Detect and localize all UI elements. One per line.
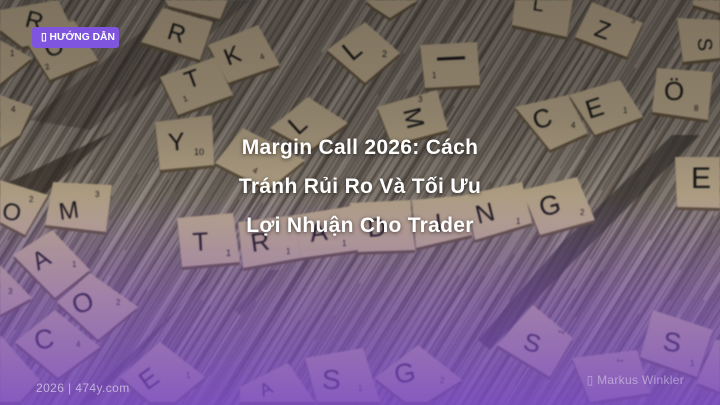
tile: Z: 3 (631, 16, 636, 25)
tile: O under badge: O (41, 32, 68, 64)
tile: bottom S: S (322, 364, 341, 395)
tile: O left: 2 (29, 195, 34, 204)
tile: S: S (520, 328, 544, 359)
tile: O lower: 2 (116, 298, 121, 307)
tile: A trading (296, 205, 358, 258)
tile: bottom S: 1 (358, 384, 363, 393)
tile: A lower left (13, 230, 90, 298)
tile: O lower: O (68, 285, 98, 321)
title: Margin Call 2026: Cách (242, 136, 478, 159)
tile: L: L (336, 33, 367, 67)
tile: lower right blank: 1 (615, 358, 625, 364)
tile: A lower left: A (27, 243, 56, 276)
tile: bottom G: 2 (440, 376, 445, 385)
tile: C: C (529, 101, 556, 136)
tile: L lower (270, 97, 348, 150)
tile: T trading: T (192, 226, 209, 257)
tile: corner (693, 0, 720, 13)
tile: lower right blank (572, 350, 650, 402)
tile: I trading (412, 195, 472, 248)
category badge: ▯ HƯỚNG DẪN (41, 32, 115, 43)
tile: top L right (512, 0, 573, 37)
tile: Y (155, 115, 214, 170)
tile: T: 1 (182, 94, 189, 104)
tile: E right: E (691, 162, 711, 195)
tile: E lower (120, 342, 205, 402)
tile: left 4: 4 (11, 105, 16, 114)
tile: G trading: G (536, 188, 564, 223)
tile: R trading: 1 (286, 247, 291, 256)
tile: T: T (181, 64, 204, 95)
tile: M rotated: 3 (418, 95, 423, 104)
tile: top strip (165, 0, 228, 19)
tile: N trading: N (472, 196, 498, 230)
tile: L: 2 (382, 49, 387, 59)
tile: K: 4 (258, 52, 266, 62)
tile: A lower left: 1 (72, 260, 77, 269)
category badge (32, 27, 119, 48)
tile: left edge (0, 40, 32, 84)
tile: left 3: 3 (8, 287, 13, 296)
tile: left edge: 1 (10, 49, 15, 58)
tile: right edge (697, 340, 720, 392)
tile: E lower: E (133, 361, 165, 396)
tile: Z: Z (591, 15, 614, 46)
tile: A trading: 1 (342, 239, 347, 248)
tile: G trading (522, 177, 595, 235)
tile: R (141, 8, 213, 60)
tile: bottom S (305, 348, 380, 402)
tile: A trading: A (308, 216, 330, 248)
tile: Y: Y (167, 128, 186, 157)
tile: centre 4: 4 (251, 166, 259, 176)
tile: E lower: 1 (186, 371, 191, 380)
tile: T trading (177, 213, 240, 267)
tile: C lower: 4 (76, 340, 81, 349)
tile: O under badge (27, 20, 98, 80)
tile: D trading: D (366, 212, 387, 243)
tile: top left R: R (22, 6, 46, 36)
tile: S top right: S (693, 37, 715, 52)
tile: K: K (220, 41, 245, 72)
tile: bottom G (375, 345, 462, 402)
tile: D trading (350, 200, 415, 252)
tile: M (45, 182, 112, 232)
tile: M rotated (377, 90, 448, 145)
tile: left bottom (0, 335, 40, 402)
tile: centre 4 (215, 128, 305, 190)
tile: E: E (582, 91, 607, 125)
tile: L lower: L (282, 108, 313, 140)
tile: I: 1 (432, 71, 437, 80)
tile: R trading (238, 215, 300, 268)
tile: M: 3 (95, 190, 100, 199)
tile: M rotated: M (397, 105, 429, 132)
tile: S right: S (661, 326, 683, 358)
tile: left 3 (0, 265, 32, 315)
tile: O under badge: 2 (44, 62, 51, 72)
tile: S: 1 (556, 328, 567, 336)
title: Lợi Nhuận Cho Trader (246, 214, 474, 237)
tile: S right (640, 310, 713, 377)
tile: bottom G: G (392, 357, 418, 390)
tile: S right: 1 (690, 359, 695, 368)
tile: C (515, 95, 588, 150)
tile: O lower (57, 273, 138, 340)
tile: O umlaut: Ö (664, 76, 684, 106)
tile: L (327, 22, 400, 83)
tile: N trading: 1 (516, 217, 521, 226)
tile: top middle (365, 0, 418, 18)
tile: C lower: C (32, 323, 56, 356)
tile: R trading: R (249, 226, 271, 258)
tile: N trading (465, 182, 532, 240)
tile: bottom A (240, 363, 315, 402)
tile: Y: 10 (194, 147, 204, 157)
title: Tránh Rủi Ro Và Tối Ưu (239, 175, 481, 198)
tile: T (160, 57, 233, 115)
tile: O umlaut (652, 68, 713, 120)
tile: T trading: 1 (226, 248, 231, 258)
tile: E right (675, 157, 720, 208)
tile: E: 1 (623, 106, 628, 115)
tile: Z (575, 2, 643, 57)
photo credit: ▯ Markus Winkler (587, 373, 684, 387)
title (238, 136, 482, 238)
tile: K (208, 25, 280, 83)
tile: left 4 (0, 95, 33, 148)
tile: M: M (57, 196, 81, 226)
tile: C: 4 (571, 121, 576, 130)
tile: S (497, 305, 573, 377)
tile: O left (0, 180, 48, 235)
year and site label: 2026 | 474y.com (36, 381, 130, 395)
tile: G trading: 2 (580, 208, 585, 217)
tile: O left: O (0, 197, 24, 228)
tile: C lower (15, 310, 100, 378)
tile: O umlaut: 8 (694, 104, 699, 113)
tile: I (420, 42, 480, 88)
tile: E (569, 80, 643, 135)
tile: bottom A: A (256, 377, 276, 401)
tile: top left R (0, 0, 76, 47)
tile: R: R (164, 18, 189, 49)
tile: I trading: I (433, 207, 444, 238)
tile: S top right (677, 18, 720, 62)
